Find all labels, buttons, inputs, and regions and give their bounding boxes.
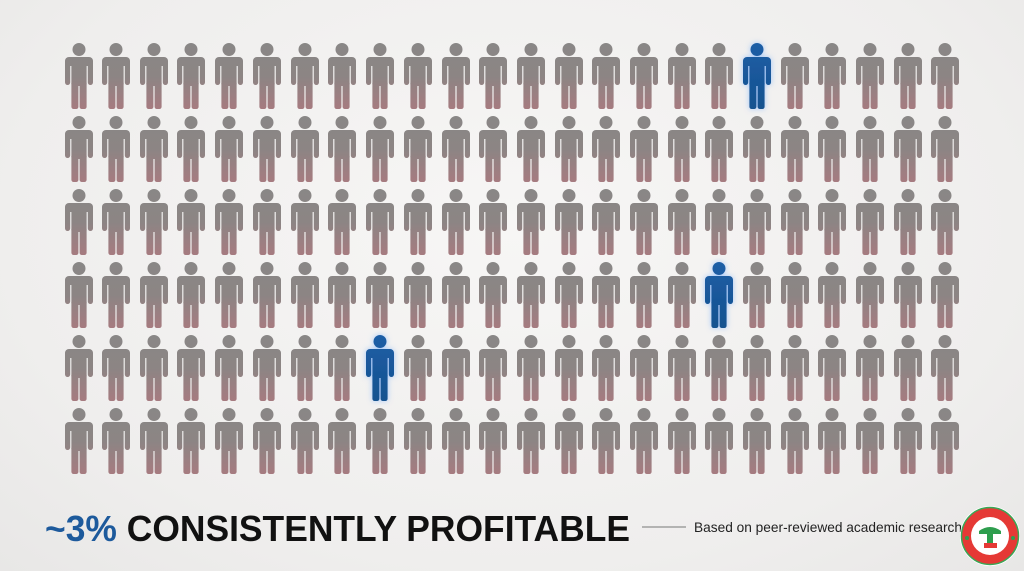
grey figures — [65, 43, 959, 474]
headline: ~3% CONSISTENTLY PROFITABLE — [45, 508, 630, 549]
icon: logo — [960, 506, 1020, 566]
chart: grid of people — [65, 43, 959, 474]
source note: Based on peer-reviewed academic research — [694, 519, 962, 535]
blue highlighted figures — [366, 43, 771, 401]
